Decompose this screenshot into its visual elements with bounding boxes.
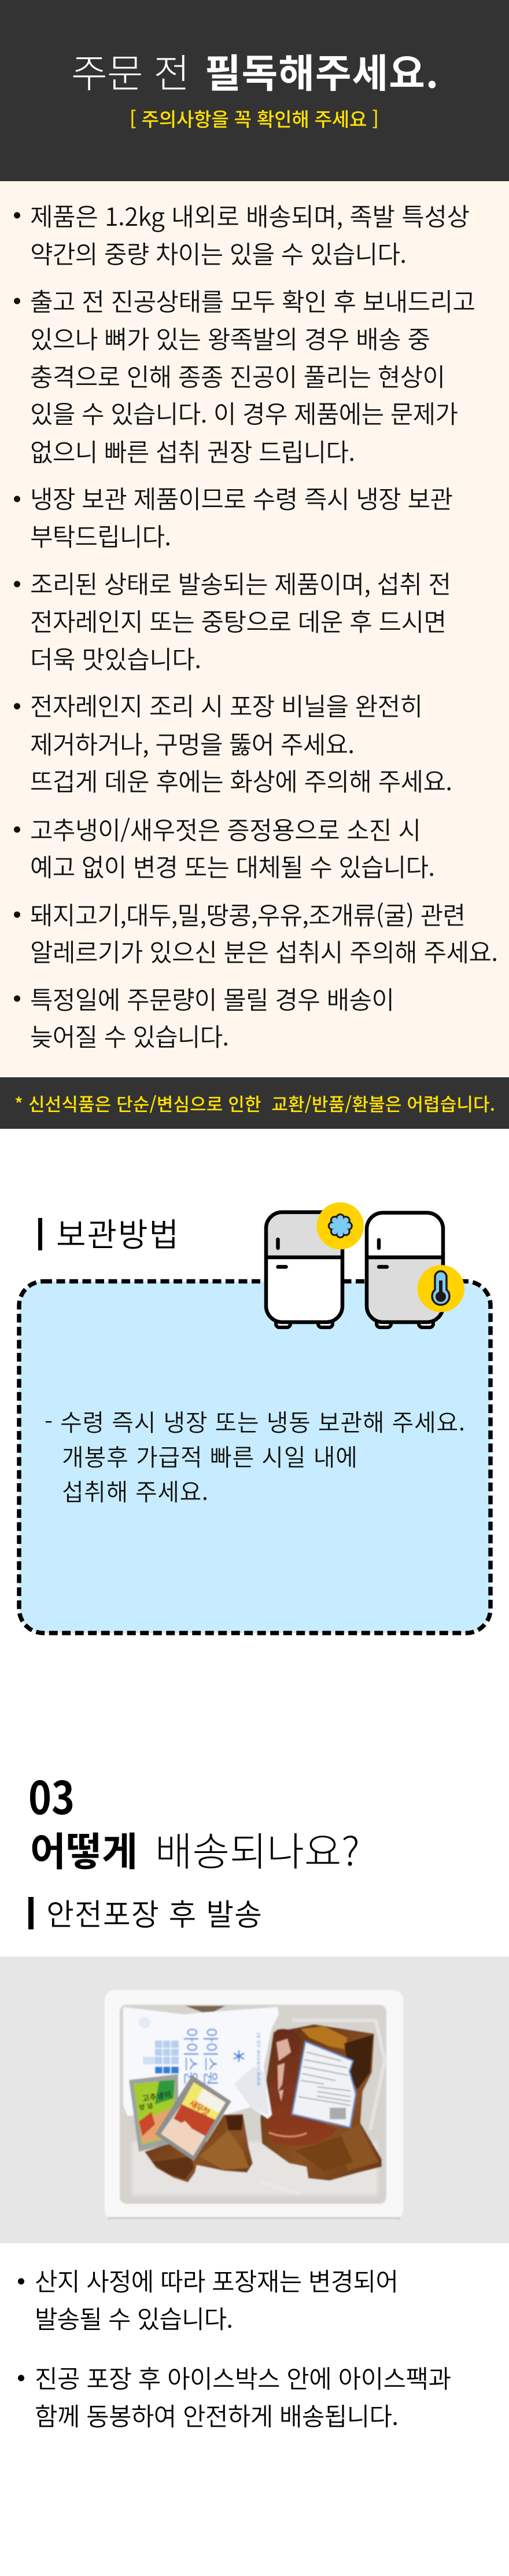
ice pack print (180, 2028, 262, 2086)
delivery note 1: 발송될 수 있습니다. (35, 2300, 233, 2336)
panel: storage box (19, 1282, 490, 1633)
illustration: wasabi sauce packet: 양념 (138, 2101, 153, 2112)
header panel (0, 0, 509, 181)
section heading: 03 how is it delivered (28, 1763, 360, 1877)
icon: snowflake (328, 1213, 353, 1238)
delivery note 1: 산지 사정에 따라 포장재는 변경되어 (35, 2262, 399, 2298)
storage instructions: 개봉후 가급적 빠른 시일 내에 (62, 1438, 357, 1473)
storage instructions: 섭취해 주세요. (62, 1473, 208, 1507)
precaution 4: 조리된 상태로 발송되는 제품이며, 섭취 전 (30, 565, 451, 601)
title (71, 42, 438, 99)
precaution 3 (14, 480, 453, 553)
subheading: safe packaging: 안전포장 후 발송 (46, 1891, 262, 1934)
illustration: product label (292, 2042, 356, 2127)
section heading: 03 how is it delivered: 어떻게 (30, 1820, 138, 1877)
precaution 5 (14, 687, 452, 798)
section heading: 03 how is it delivered: 03 (28, 1763, 75, 1828)
illustration: wasabi sauce packet: 고추냉이 (142, 2088, 172, 2104)
precaution 1: 제품은 1.2kg 내외로 배송되며, 족발 특성상 (30, 197, 470, 233)
precaution 7: 돼지고기,대두,밀,땅콩,우유,조개류(굴) 관련 (30, 896, 466, 932)
panel: delivery notes (18, 2262, 451, 2433)
storage instructions: - 수령 즉시 냉장 또는 냉동 보관해 주세요. (45, 1403, 465, 1438)
precaution 2: 충격으로 인해 종종 진공이 풀리는 현상이 (30, 358, 445, 394)
precaution 2: 출고 전 진공상태를 모두 확인 후 보내드리고 (30, 282, 475, 318)
precaution 7 (14, 896, 498, 969)
delivery note 2 (18, 2360, 451, 2433)
ice pack print: www.iceone.co.kr (256, 2032, 262, 2086)
precaution 3: 냉장 보관 제품이므로 수령 즉시 냉장 보관 (30, 480, 453, 516)
precaution 2: 있을 수 있습니다. 이 경우 제품에는 문제가 (30, 395, 458, 431)
panel: precautions list (0, 181, 509, 1077)
precaution 6: 예고 없이 변경 또는 대체될 수 있습니다. (30, 848, 435, 884)
illustration: foam box with contents (105, 1990, 403, 2220)
notice bar: * 신선식품은 단순/변심으로 인한 교환/반품/환불은 어렵습니다. (14, 1090, 495, 1116)
icon: refrigerator with thermometer (367, 1213, 464, 1327)
ice pack print: 아이스원 (180, 2028, 203, 2086)
precaution 5: 뜨겁게 데운 후에는 화상에 주의해 주세요. (30, 762, 452, 798)
ice pack print: 아이스원 (200, 2028, 223, 2086)
section heading: 03 how is it delivered: 배송되나요? (155, 1820, 360, 1877)
illustration: wasabi sauce packet (129, 2074, 178, 2152)
delivery note 1 (18, 2262, 399, 2336)
title: 주문 전 (71, 42, 190, 99)
delivery note 2: 진공 포장 후 아이스박스 안에 아이스팩과 (35, 2360, 451, 2395)
title: 필독해주세요. (205, 42, 438, 99)
precaution 8 (14, 981, 394, 1054)
heading: storage method: 보관방법 (56, 1209, 179, 1256)
icon: thermometer (432, 1271, 449, 1305)
precaution 5: 전자레인지 조리 시 포장 비닐을 완전히 (30, 687, 423, 723)
precaution 2 (14, 282, 475, 469)
illustration: right pork portion (260, 2020, 385, 2194)
precaution 4 (14, 565, 451, 676)
notice bar (0, 1077, 509, 1129)
precaution 2: 있으나 뼈가 있는 왕족발의 경우 배송 중 (30, 320, 430, 356)
illustration: left pork portion (145, 2114, 253, 2182)
precaution 4: 더욱 맛있습니다. (30, 640, 201, 676)
precaution 7: 알레르기가 있으신 분은 섭취시 주의해 주세요. (30, 933, 498, 969)
illustration: ice pack (123, 2007, 279, 2119)
icon: freezer refrigerator (266, 1202, 364, 1327)
precaution 1 (14, 197, 470, 271)
precaution 2: 없으니 빠른 섭취 권장 드립니다. (30, 433, 355, 469)
illustration: shrimp sauce packet (155, 2075, 231, 2161)
precaution 8: 늦어질 수 있습니다. (30, 1018, 229, 1054)
precaution 4: 전자레인지 또는 중탕으로 데운 후 드시면 (30, 603, 447, 639)
precaution 6 (14, 811, 435, 884)
precaution 5: 제거하거나, 구멍을 뚫어 주세요. (30, 725, 355, 761)
precaution 3: 부탁드립니다. (30, 518, 171, 553)
subtitle: [ 주의사항을 꼭 확인해 주세요 ] (130, 104, 379, 132)
precaution 1: 약간의 중량 차이는 있을 수 있습니다. (30, 235, 407, 271)
storage instructions (45, 1403, 465, 1507)
illustration: shrimp sauce packet: 새우젓 (187, 2097, 212, 2119)
precaution 8: 특정일에 주문량이 몰릴 경우 배송이 (30, 981, 394, 1017)
delivery note 2: 함께 동봉하여 안전하게 배송됩니다. (35, 2397, 399, 2433)
precaution 6: 고추냉이/새우젓은 증정용으로 소진 시 (30, 811, 421, 847)
panel: packaging photo (0, 1957, 509, 2243)
